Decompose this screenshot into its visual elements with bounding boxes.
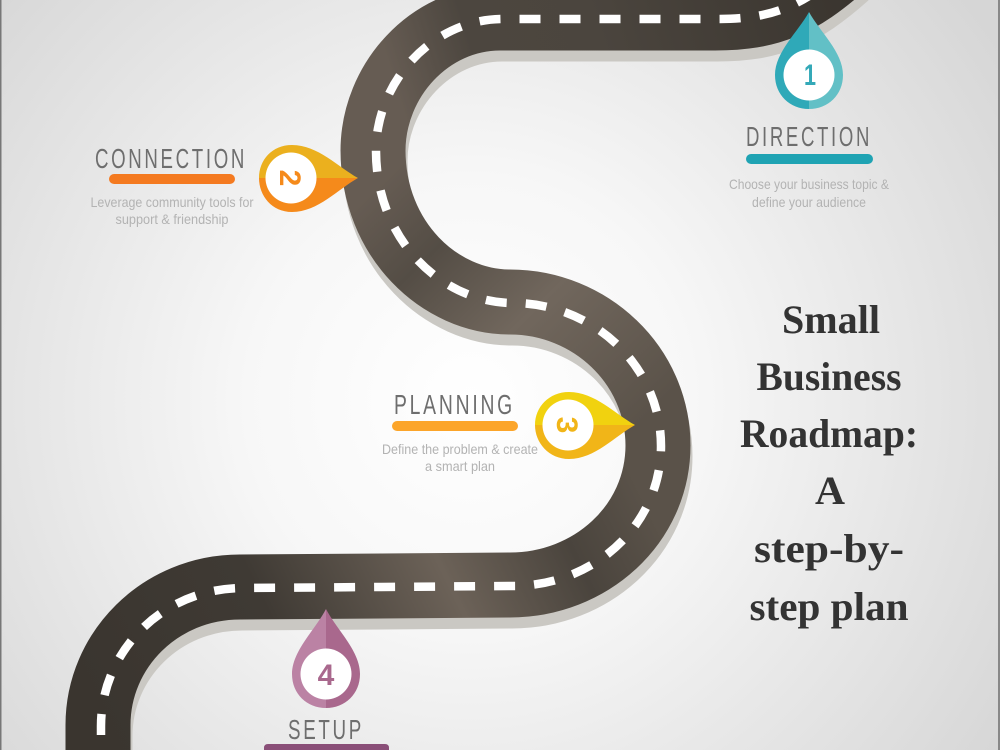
winding road <box>98 0 848 750</box>
text: connection description: Leverage community tools for <box>90 194 254 210</box>
text: direction description: define your audience <box>752 194 866 210</box>
title: step plan <box>750 584 908 629</box>
road centre dashes <box>101 0 848 750</box>
text: connection description: support & friendship <box>116 211 229 227</box>
bar: planning <box>392 421 518 431</box>
icon: pin 2 <box>259 145 358 212</box>
heading: direction: DIRECTION <box>746 121 872 152</box>
bar: direction <box>746 154 873 164</box>
icon: pin 3 <box>535 392 635 459</box>
icon: pin 2: 2 <box>273 170 306 186</box>
step 2: connection <box>90 143 358 227</box>
icon: pin 1 <box>775 12 843 109</box>
heading: planning: PLANNING <box>394 389 515 420</box>
text: planning description: Define the problem & create <box>382 441 538 457</box>
step 3: planning <box>382 389 635 474</box>
title: Small <box>782 297 880 342</box>
road shadow <box>100 0 847 750</box>
title: Business <box>756 354 902 399</box>
bar: setup <box>264 744 389 750</box>
title: A <box>815 468 845 513</box>
title: step-by- <box>754 526 904 571</box>
icon: pin 4 <box>292 609 360 708</box>
icon: pin 3: 3 <box>550 417 583 433</box>
title: Roadmap: <box>740 411 918 456</box>
road surface <box>98 0 845 750</box>
step 4: setup <box>264 609 389 750</box>
text: planning description <box>382 441 538 474</box>
heading: connection: CONNECTION <box>95 143 247 174</box>
icon: pin 1: 1 <box>804 59 816 92</box>
text: direction description: Choose your business topic & <box>729 176 890 192</box>
step 1: direction <box>729 12 890 210</box>
title <box>740 297 918 629</box>
text: planning description: a smart plan <box>425 458 495 474</box>
text: connection description <box>90 194 254 227</box>
text: direction description <box>729 176 890 210</box>
icon: pin 4: 4 <box>318 659 335 692</box>
heading: setup: SETUP <box>288 714 364 745</box>
bar: connection <box>109 174 235 184</box>
